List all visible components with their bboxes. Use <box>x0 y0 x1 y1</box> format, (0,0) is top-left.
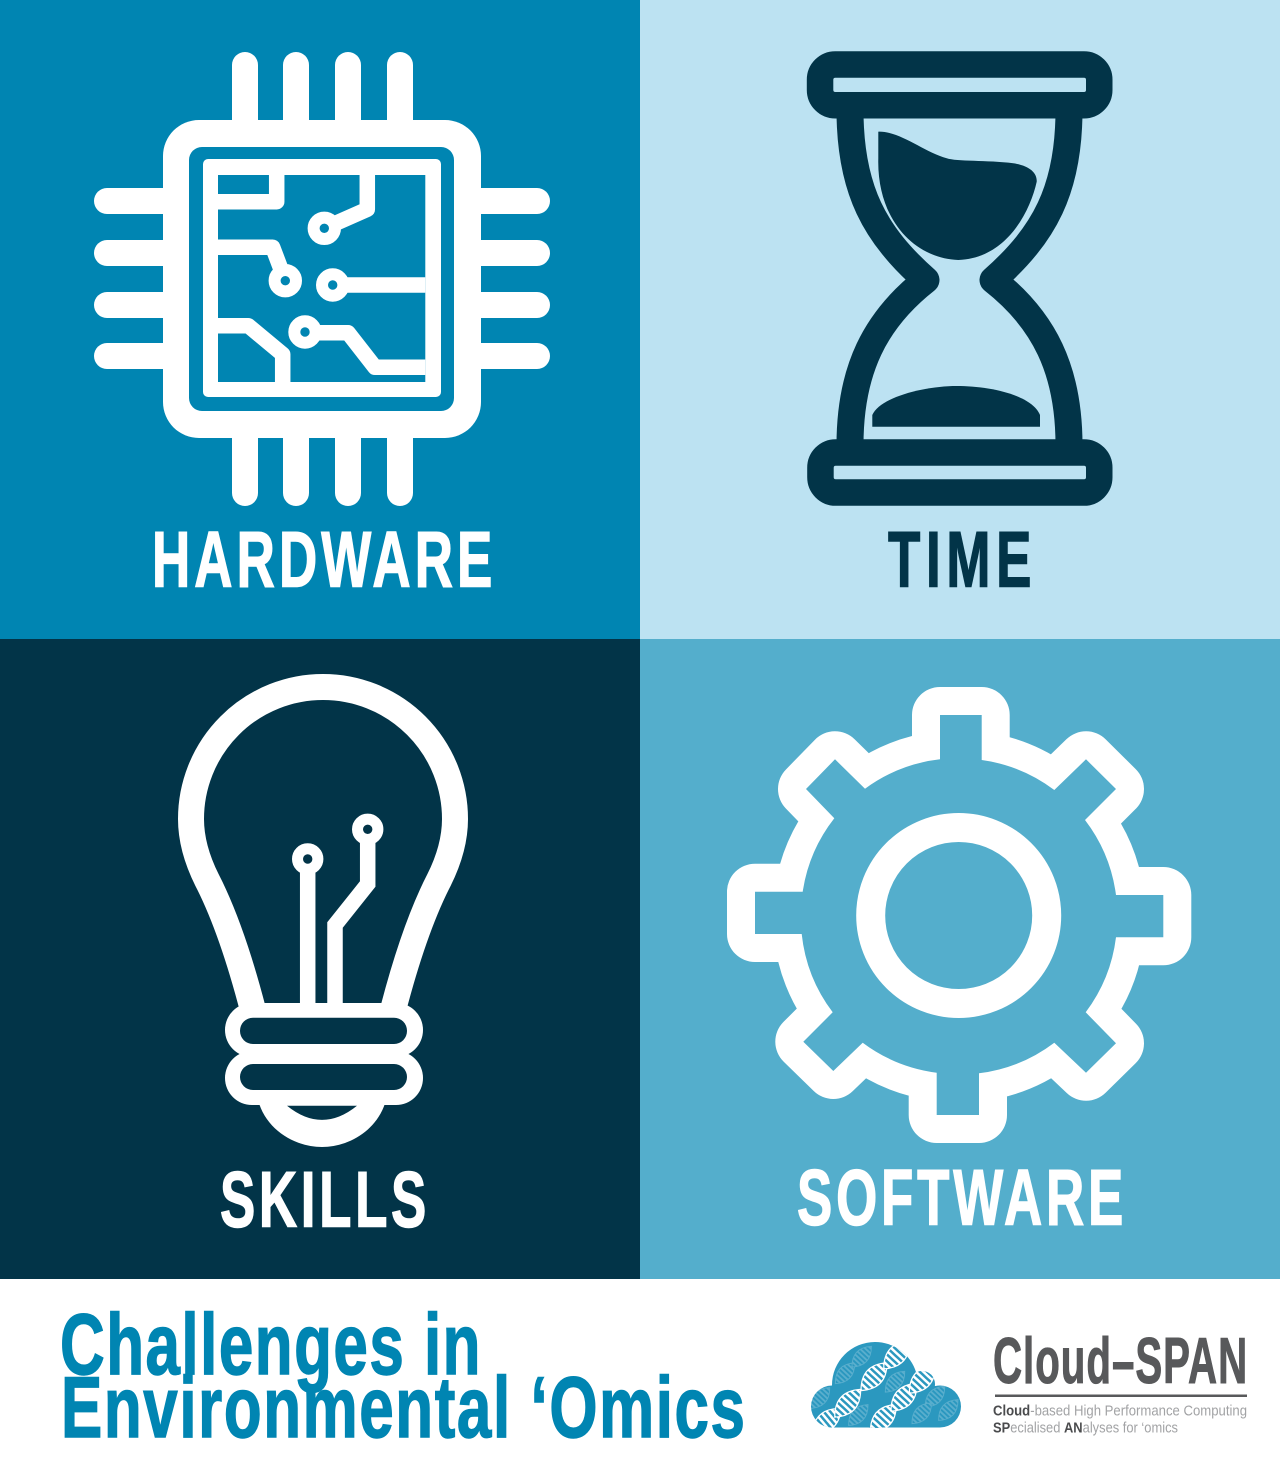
logo: Cloud-SPAN wordmark: Cloud–SPAN <box>993 1325 1247 1397</box>
label: skills: SKILLS <box>220 1156 426 1244</box>
logo: Cloud-SPAN wordmark: SPecialised ANalyses for ‘omics <box>993 1420 1178 1436</box>
label: software: SOFTWARE <box>797 1154 1123 1242</box>
icon: light bulb <box>191 687 455 1147</box>
panel: hardware <box>0 0 640 639</box>
title: Challenges in <box>60 1296 480 1392</box>
logo: Cloud-SPAN wordmark <box>993 1325 1247 1436</box>
logo: Cloud-SPAN wordmark: Cloud-based High Performance Computing <box>993 1404 1247 1420</box>
label: time: TIME <box>888 516 1031 604</box>
title: Environmental ‘Omics <box>61 1359 745 1455</box>
icon: hourglass <box>833 78 1086 479</box>
label: hardware: HARDWARE <box>152 516 492 604</box>
title <box>60 1296 745 1455</box>
panel: skills <box>0 639 640 1279</box>
icon: microchip <box>94 52 550 506</box>
panel: time <box>640 0 1280 639</box>
logo: cloud with DNA <box>811 1342 961 1428</box>
icon: gear <box>755 715 1163 1115</box>
panel: software <box>640 639 1280 1279</box>
